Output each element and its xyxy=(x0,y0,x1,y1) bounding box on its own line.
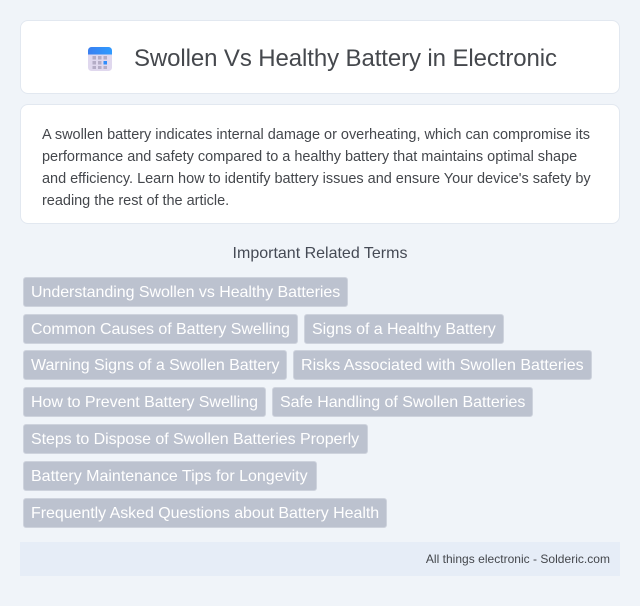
tag: Common Causes of Battery Swelling xyxy=(31,321,290,338)
tag: Signs of a Healthy Battery xyxy=(312,321,496,338)
tag: Frequently Asked Questions about Battery Health xyxy=(31,505,379,522)
title: Swollen Vs Healthy Battery in Electronic xyxy=(134,45,557,72)
footer bar xyxy=(20,542,620,576)
tag: Warning Signs of a Swollen Battery xyxy=(31,357,280,374)
tag xyxy=(23,424,368,454)
tag xyxy=(23,498,387,528)
tag xyxy=(23,461,317,491)
icon: calendar xyxy=(88,47,112,71)
tag: Battery Maintenance Tips for Longevity xyxy=(31,468,308,485)
text block: intro: and efficiency. Learn how to identify battery issues and ensure Your device's safety by xyxy=(42,171,591,187)
heading: related terms: Important Related Terms xyxy=(233,245,407,262)
tag: Safe Handling of Swollen Batteries xyxy=(280,394,525,411)
tag: How to Prevent Battery Swelling xyxy=(31,394,258,411)
tag xyxy=(293,350,592,380)
text block: intro: A swollen battery indicates internal damage or overheating, which can compromise its xyxy=(42,127,590,143)
text block: intro: reading the rest of the article. xyxy=(42,193,229,209)
panel: intro text xyxy=(20,104,620,224)
text block: intro: performance and safety compared to a healthy battery that maintains optimal shape xyxy=(42,149,577,165)
tag: Steps to Dispose of Swollen Batteries Properly xyxy=(31,431,359,448)
tag xyxy=(23,387,266,417)
panel: header xyxy=(20,20,620,94)
tag xyxy=(304,314,504,344)
tag: Understanding Swollen vs Healthy Batteries xyxy=(31,284,340,301)
tag xyxy=(23,277,348,307)
tag xyxy=(23,314,298,344)
tag xyxy=(23,350,287,380)
footer text: All things electronic - Solderic.com xyxy=(426,552,610,566)
text block: intro xyxy=(42,127,591,209)
tag xyxy=(272,387,533,417)
panel: related term tags xyxy=(23,277,592,528)
tag: Risks Associated with Swollen Batteries xyxy=(301,357,584,374)
